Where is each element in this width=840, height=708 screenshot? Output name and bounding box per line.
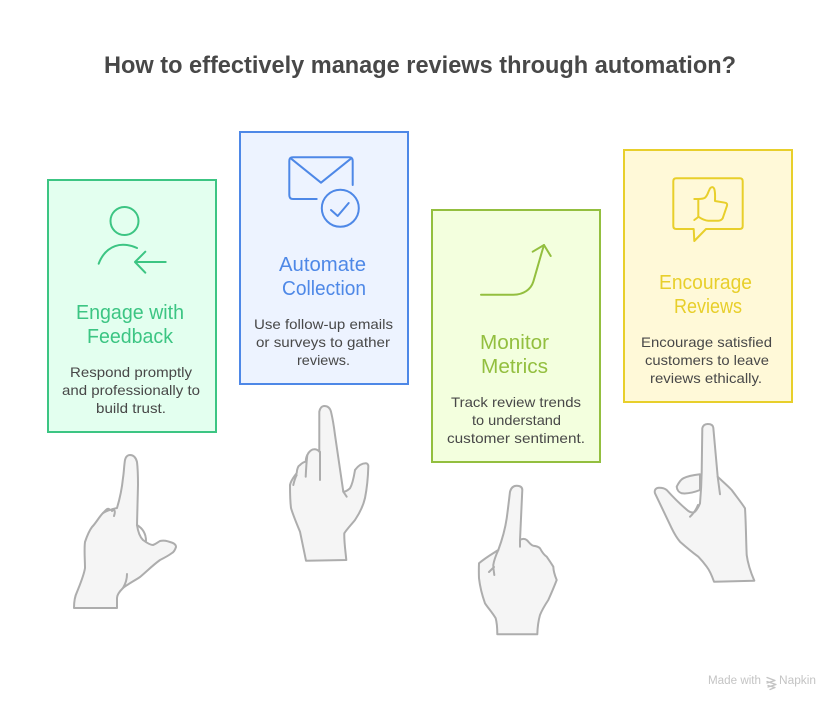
icon: thumbs up speech bubble bbox=[673, 178, 743, 241]
icon: hand 1 pointing up bbox=[74, 455, 176, 608]
description: Encourage satisfied bbox=[641, 334, 772, 350]
description: to understand bbox=[472, 412, 561, 428]
description bbox=[641, 334, 772, 386]
title: How to effectively manage reviews through automation? bbox=[104, 52, 736, 79]
heading bbox=[480, 332, 549, 378]
icon: rising arrow bbox=[481, 245, 551, 295]
icon: hand 3 pointing up bbox=[479, 486, 557, 634]
description: Track review trends bbox=[451, 394, 581, 410]
heading: Metrics bbox=[481, 356, 548, 378]
icon: napkin logo bbox=[767, 678, 776, 690]
description: or surveys to gather bbox=[256, 334, 390, 350]
heading bbox=[279, 254, 366, 300]
description: customers to leave bbox=[645, 352, 769, 368]
credit: made with napkin: Made with bbox=[708, 675, 761, 687]
description bbox=[447, 394, 585, 446]
description: reviews ethically. bbox=[650, 370, 762, 386]
heading: Automate bbox=[279, 254, 366, 276]
heading: Reviews bbox=[674, 296, 742, 318]
heading: Engage with bbox=[76, 302, 184, 324]
panel: encourage reviews bbox=[624, 150, 792, 402]
heading: Monitor bbox=[480, 332, 549, 354]
panel: engage with feedback bbox=[48, 180, 216, 432]
description: and professionally to bbox=[62, 382, 200, 398]
icon: hand 4 pointing up bbox=[655, 424, 754, 582]
credit: made with napkin bbox=[708, 675, 816, 690]
panel: automate collection bbox=[240, 132, 408, 384]
panel: monitor metrics bbox=[432, 210, 600, 462]
description bbox=[62, 364, 200, 416]
card background bbox=[624, 150, 792, 402]
description bbox=[254, 316, 393, 368]
description: Respond promptly bbox=[70, 364, 192, 380]
heading bbox=[659, 272, 752, 318]
description: reviews. bbox=[297, 352, 350, 368]
icon: envelope with check bbox=[289, 157, 359, 227]
heading: Feedback bbox=[87, 326, 174, 348]
credit: made with napkin: Napkin bbox=[779, 675, 816, 687]
icon: person with arrow bbox=[99, 207, 166, 273]
icon: hand 2 pointing up bbox=[290, 406, 368, 561]
card background bbox=[240, 132, 408, 384]
description: customer sentiment. bbox=[447, 430, 585, 446]
heading: Collection bbox=[282, 278, 366, 300]
description: Use follow-up emails bbox=[254, 316, 393, 332]
card background bbox=[432, 210, 600, 462]
description: build trust. bbox=[96, 400, 166, 416]
heading bbox=[76, 302, 184, 348]
card background bbox=[48, 180, 216, 432]
heading: Encourage bbox=[659, 272, 752, 294]
